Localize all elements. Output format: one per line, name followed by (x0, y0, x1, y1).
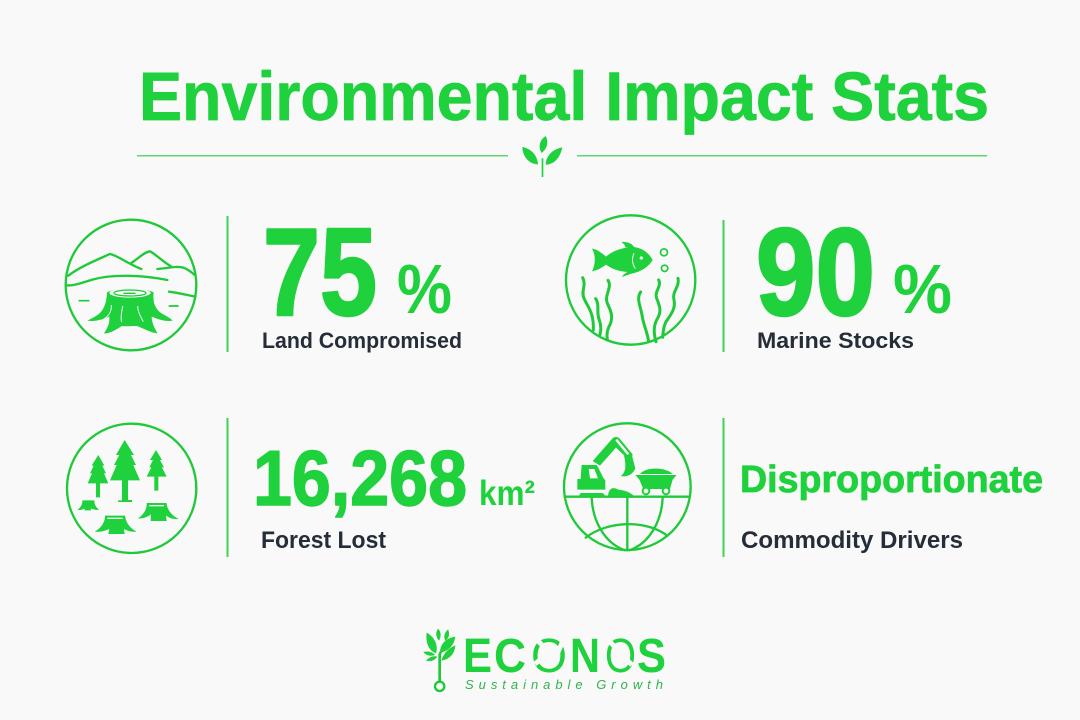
title: Environmental Impact Stats (139, 58, 989, 135)
divider (722, 418, 724, 557)
wordmark: E (463, 630, 492, 683)
wordmark: O (605, 630, 636, 683)
divider (226, 418, 228, 557)
stat value: 90%: % (893, 250, 952, 328)
stat value: Disproportionate: Disproportionate (740, 459, 1043, 501)
icon: sprout (522, 136, 562, 177)
panel: land compromised (66, 204, 462, 353)
divider (722, 220, 724, 352)
icon: fish and seaweed (566, 215, 695, 345)
icon: tree stump in landscape (66, 220, 196, 350)
panel: forest lost (67, 418, 535, 557)
gaps in recycled O letters (535, 640, 632, 665)
stat label: Marine Stocks (757, 328, 914, 353)
divider (226, 216, 228, 352)
wordmark: C (494, 630, 526, 683)
icon: trees and stumps (67, 424, 196, 553)
stat label: Forest Lost (261, 527, 386, 554)
stat value: 16,268 km²: km² (479, 474, 535, 513)
icon: excavator, mining cart and globe (564, 423, 691, 550)
icon: logo plant (423, 629, 455, 691)
wordmark: O (531, 630, 567, 683)
stat value: 16,268 km²: 16,268 (253, 434, 467, 522)
stat label: Commodity Drivers (741, 527, 963, 554)
panel: marine stocks (566, 204, 952, 353)
wordmark (463, 630, 666, 683)
logo: Econos (423, 629, 666, 692)
panel: commodity drivers (564, 418, 1043, 557)
stat value: 75%: % (397, 250, 452, 328)
stat value: 90%: 90 (756, 204, 875, 342)
header divider with leaf icon (137, 136, 987, 177)
tagline: Sustainable Growth (465, 677, 663, 692)
wordmark: S (637, 630, 666, 683)
wordmark: N (570, 630, 600, 683)
stat value: 75%: 75 (263, 204, 377, 342)
stat label: Land Compromised (262, 328, 462, 353)
